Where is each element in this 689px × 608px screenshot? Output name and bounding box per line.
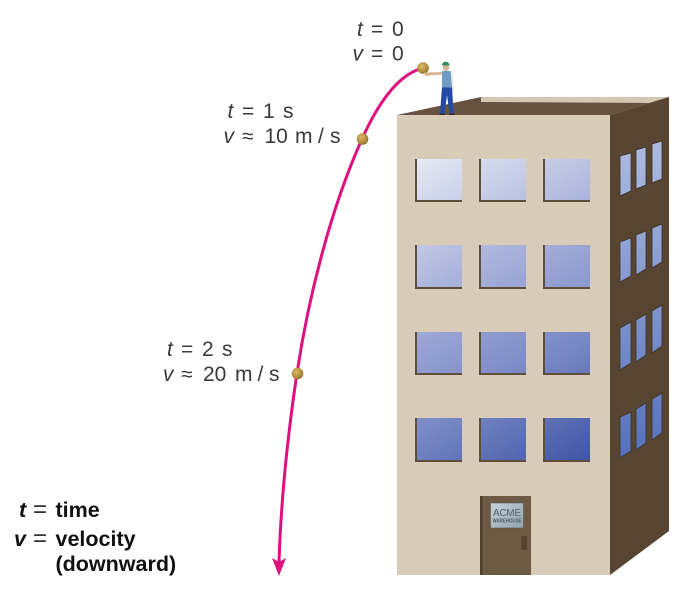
building: [397, 97, 669, 575]
label: t=2 s: =: [181, 338, 193, 361]
vest: [442, 71, 452, 88]
label: t=0: 0: [392, 42, 404, 66]
side windows: [620, 141, 662, 458]
label: t=0: 0: [392, 18, 404, 41]
label: t=1 s: /: [318, 125, 324, 148]
cap: [442, 62, 450, 66]
label: t=1 s: v: [224, 125, 236, 148]
ball at t=1: [357, 133, 368, 145]
label: t=1 s: s: [330, 125, 340, 148]
legend: v: [14, 527, 27, 551]
label: t=0: [352, 18, 404, 66]
label: t=2 s: /: [258, 363, 264, 386]
legend: velocity: [56, 527, 136, 551]
roof: [397, 97, 669, 115]
label: t=2 s: s: [222, 338, 232, 361]
legend: [14, 496, 176, 576]
label: t=2 s: v: [163, 363, 175, 386]
label: t=2 s: ≈: [181, 363, 193, 386]
door sign: WAREHOUSE: [492, 518, 522, 524]
shirt: [447, 71, 454, 92]
label: t=0: t: [357, 18, 364, 41]
label: t=1 s: t: [228, 100, 234, 123]
label: t=1 s: ≈: [242, 125, 254, 148]
legend: time: [56, 498, 100, 522]
label: t=2 s: 20: [203, 363, 226, 386]
legs: [440, 87, 454, 114]
label: t=1 s: s: [283, 100, 294, 123]
label: t=0: =: [371, 42, 383, 66]
label: t=1 s: 10: [264, 125, 288, 148]
door sign: [490, 503, 524, 528]
person on roof: [424, 62, 454, 115]
shoes: [440, 114, 454, 115]
label: t=2 s: s: [269, 363, 280, 386]
front windows: [415, 159, 590, 462]
right side wall: [610, 97, 669, 575]
label: t=2 s: m: [235, 363, 252, 386]
trajectory arrow: [272, 68, 423, 576]
door sign: ACME: [493, 508, 521, 519]
label: t=0: =: [371, 18, 383, 41]
label: t=1 s: [224, 100, 340, 148]
label: t=1 s: =: [242, 100, 254, 123]
label: t=2 s: [163, 338, 280, 386]
label: t=1 s: m: [295, 125, 312, 148]
legend: =: [33, 525, 47, 552]
label: t=2 s: t: [167, 338, 174, 361]
head: [443, 64, 449, 71]
label: t=0: v: [352, 42, 364, 66]
legend: t: [19, 498, 27, 522]
ball at t=0: [417, 62, 429, 74]
arm: [424, 72, 442, 76]
ball at t=2: [292, 368, 303, 379]
front wall: [397, 115, 610, 575]
legend: =: [33, 496, 47, 523]
door: [480, 496, 531, 575]
legend: (downward): [56, 552, 176, 576]
label: t=2 s: 2: [202, 338, 214, 361]
label: t=1 s: 1: [263, 100, 275, 123]
